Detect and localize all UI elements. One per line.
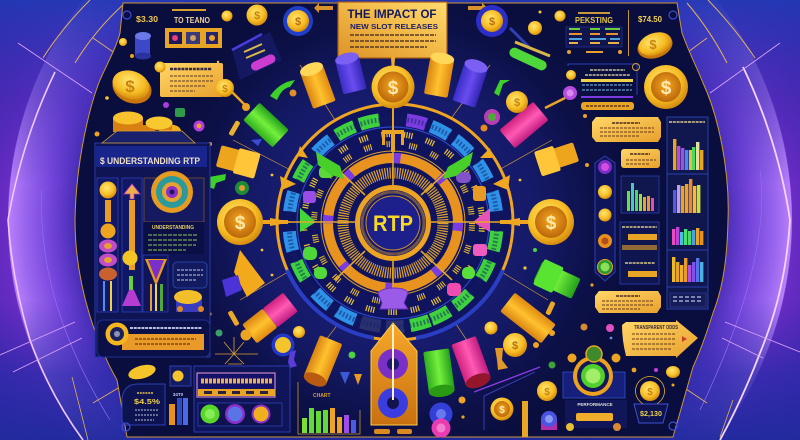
purple cylinder top-right xyxy=(452,57,489,108)
hub: RTP xyxy=(373,211,413,236)
pink and gold cylinder lower left xyxy=(242,293,298,343)
panel: top-right rates: $74.50 xyxy=(638,15,663,24)
text block with green lines: UNDERSTANDING xyxy=(152,225,194,231)
top-row coin tokens: $ xyxy=(295,16,301,28)
panel: right chart column xyxy=(667,117,708,309)
tilted coin top-right: $ xyxy=(649,37,657,52)
stacked info panel xyxy=(620,222,659,284)
top-row coin tokens xyxy=(283,5,508,37)
purple promo card top-left xyxy=(232,32,282,80)
coin lower right xyxy=(537,381,557,401)
green wheel arrows xyxy=(316,152,473,179)
green button xyxy=(200,404,220,424)
yellow coin with ring: $ xyxy=(647,387,653,398)
top coin with trident pointer xyxy=(372,52,414,152)
pedestal xyxy=(378,288,408,309)
small markers above medallion xyxy=(533,301,614,368)
stack of coins xyxy=(113,112,181,138)
chart one xyxy=(673,139,703,170)
heading band: $ UNDERSTANDING RTP xyxy=(100,156,200,166)
green medallion: PERFORMANCE xyxy=(577,402,613,407)
vertical token column xyxy=(595,156,615,281)
panel: top-right rates xyxy=(554,10,677,56)
chart two xyxy=(673,179,700,213)
chips stack lower right xyxy=(541,411,557,430)
green hook arrow and token left xyxy=(208,80,296,195)
tilted coin top-right xyxy=(634,28,676,63)
column of coin gauge xyxy=(97,178,118,312)
hub xyxy=(355,185,431,261)
top coin with trident pointer: $ xyxy=(388,78,399,99)
gold notched card lower right xyxy=(595,291,661,313)
panel: top-left rates xyxy=(123,9,222,48)
large coin right: $ xyxy=(661,78,672,99)
gold button xyxy=(252,404,270,424)
top-row coin tokens: $ xyxy=(489,16,495,28)
promo tags top-right: $ xyxy=(514,97,520,109)
gold arrow card xyxy=(622,320,698,358)
small bar chart lower left: 34T0 xyxy=(173,392,184,397)
radial cylinders xyxy=(215,50,582,399)
panel: understanding RTP xyxy=(95,131,210,357)
panel: top-left rates: $3.30 xyxy=(136,15,159,24)
panel: slot strip with buttons xyxy=(194,366,290,432)
stack of blue chips xyxy=(119,32,151,60)
card: 34.5% stat xyxy=(122,384,165,431)
middle ring with yellow tick labels xyxy=(297,127,489,319)
gold cylinder top-left xyxy=(298,59,336,109)
card: blue outlined info xyxy=(545,64,640,110)
blue button xyxy=(225,404,245,424)
gold block right xyxy=(534,139,580,177)
outer ring of coloured cells xyxy=(289,119,497,327)
bar chart bottom centre: CHART xyxy=(313,393,330,399)
gold block left xyxy=(215,143,261,179)
title arrows xyxy=(314,3,488,13)
promo tags top-right xyxy=(480,21,550,132)
pink cylinder upper right xyxy=(499,102,549,148)
gold wheel pointers xyxy=(270,146,520,226)
tilted small coin and ring lower right xyxy=(654,366,680,430)
purple cylinder top-left xyxy=(334,50,367,94)
panel: top-right rates: PEKSTING xyxy=(575,16,613,25)
gold cylinder lower right xyxy=(500,293,556,343)
coin lower right: $ xyxy=(544,387,550,398)
coin left of wheel: $ xyxy=(235,213,246,234)
lower info band xyxy=(97,320,210,357)
decorative gems left xyxy=(163,102,262,146)
price tag $2,130 xyxy=(634,404,668,423)
note box xyxy=(173,262,207,288)
chart three xyxy=(672,227,703,245)
small wheel xyxy=(144,171,204,222)
gold horn with purple block xyxy=(222,250,265,297)
green and pink ring markers xyxy=(300,167,490,296)
coin and gauge panel lower right: $ xyxy=(499,405,505,416)
price tag $2,130: $2,130 xyxy=(640,409,662,418)
small bar chart lower left xyxy=(169,392,188,425)
corner coins top-left: $ xyxy=(254,10,260,22)
heading band xyxy=(95,146,207,167)
panel: top-left rates: TO TEANO xyxy=(174,16,210,25)
green medallion xyxy=(563,346,627,431)
tilted coin left xyxy=(108,65,156,109)
cross lines xyxy=(275,108,515,300)
coin left of wheel xyxy=(217,199,288,245)
gold card small xyxy=(621,149,660,168)
gold arrow card: TRANSPARENT ODDS xyxy=(634,325,679,331)
title card: THE IMPACT OF xyxy=(348,9,436,21)
yellow coin with ring xyxy=(636,376,664,406)
gold house with two discs xyxy=(371,323,417,434)
gold drum xyxy=(174,290,204,312)
gold cylinder top-right xyxy=(424,51,455,98)
triangle badge xyxy=(143,255,168,312)
chart four xyxy=(672,257,703,282)
text block with green lines xyxy=(144,222,204,254)
corner coins top-left xyxy=(222,4,268,26)
starburst xyxy=(215,310,258,364)
gold cylinder bottom-left xyxy=(302,335,342,390)
green block lower right xyxy=(532,258,582,302)
tilted coin left: $ xyxy=(125,77,135,96)
wheel xyxy=(270,104,520,340)
mini table xyxy=(670,293,706,307)
hatched gold ring xyxy=(343,173,443,273)
orange inner ring xyxy=(328,158,458,288)
large coin right xyxy=(644,65,688,109)
title card: NEW SLOT RELEASES xyxy=(350,22,438,31)
title card xyxy=(338,2,447,58)
pink cylinder bottom xyxy=(451,336,493,391)
coin and gauge panel lower right xyxy=(474,367,540,437)
star speckles and spoke lines xyxy=(94,10,636,372)
green cylinder upper left xyxy=(243,103,289,147)
tilted gold coin lower left xyxy=(127,362,191,386)
gold info card left xyxy=(154,62,250,111)
coin right of wheel xyxy=(500,199,574,245)
small tokens lower middle: $ xyxy=(512,340,518,352)
coin right of wheel: $ xyxy=(546,213,557,234)
green cylinder bottom xyxy=(423,348,455,399)
bar chart mid right xyxy=(621,176,659,213)
bar chart bottom centre xyxy=(298,382,360,434)
column of arrow gauge xyxy=(122,178,142,312)
gold info card left: $ xyxy=(222,84,228,95)
wheel rim xyxy=(277,104,513,340)
small tokens lower middle xyxy=(272,322,527,385)
card: 34.5% stat: $4.5% xyxy=(134,397,160,406)
poker chips bottom xyxy=(430,396,466,438)
gold notched card xyxy=(592,117,661,142)
